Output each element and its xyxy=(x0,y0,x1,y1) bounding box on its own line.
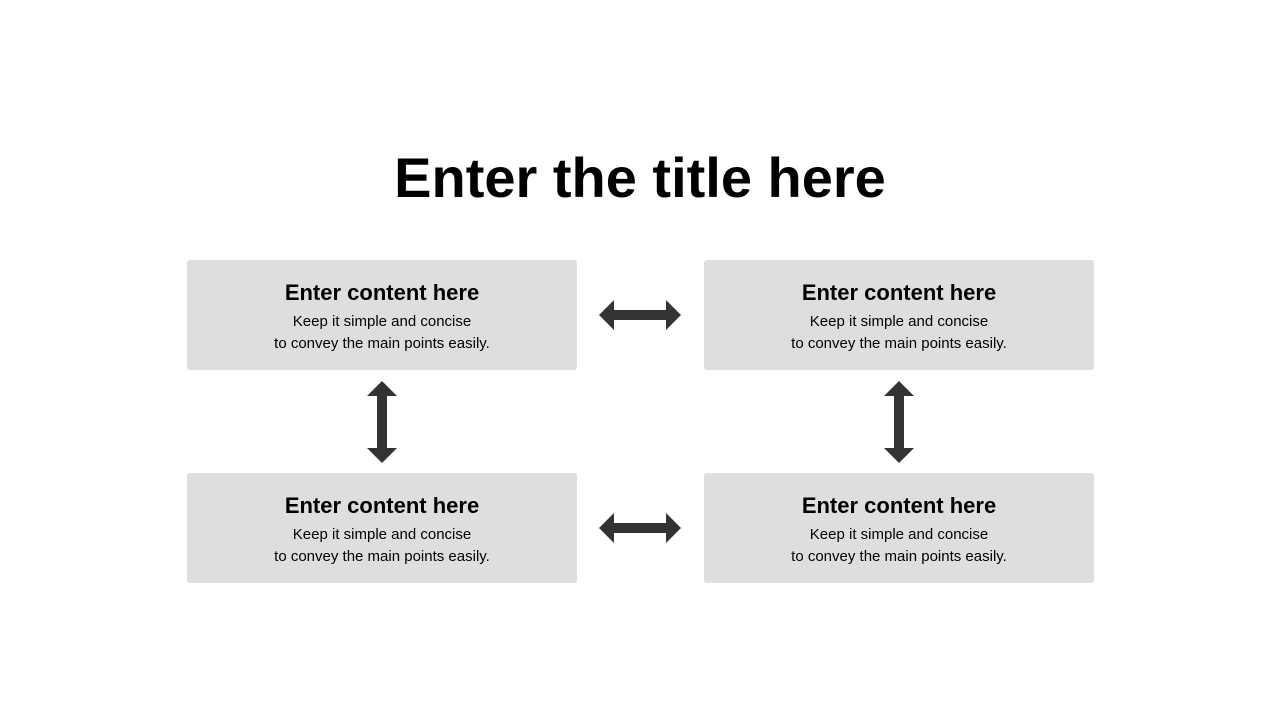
title: Enter the title here xyxy=(394,146,886,209)
panel: bottom-right: Enter content here xyxy=(802,493,996,518)
panel: bottom-left: to convey the main points easily. xyxy=(274,548,490,565)
panel: top-left xyxy=(187,260,577,370)
panel: bottom-right: to convey the main points easily. xyxy=(791,548,1007,565)
panel: top-right: to convey the main points easily. xyxy=(791,335,1007,352)
arrow: right vertical xyxy=(884,381,914,463)
panel: bottom-left: Enter content here xyxy=(285,493,479,518)
panel: top-left: to convey the main points easily. xyxy=(274,335,490,352)
panel: bottom-left xyxy=(187,473,577,583)
arrow: top horizontal xyxy=(599,300,681,330)
panel: top-left: Enter content here xyxy=(285,280,479,305)
panel: top-right xyxy=(704,260,1094,370)
arrow: bottom horizontal xyxy=(599,513,681,543)
panel: top-right: Enter content here xyxy=(802,280,996,305)
panel: bottom-right: Keep it simple and concise xyxy=(810,526,988,543)
panel: bottom-right xyxy=(704,473,1094,583)
panel: top-left: Keep it simple and concise xyxy=(293,313,471,330)
arrow: left vertical xyxy=(367,381,397,463)
panel: top-right: Keep it simple and concise xyxy=(810,313,988,330)
panel: bottom-left: Keep it simple and concise xyxy=(293,526,471,543)
